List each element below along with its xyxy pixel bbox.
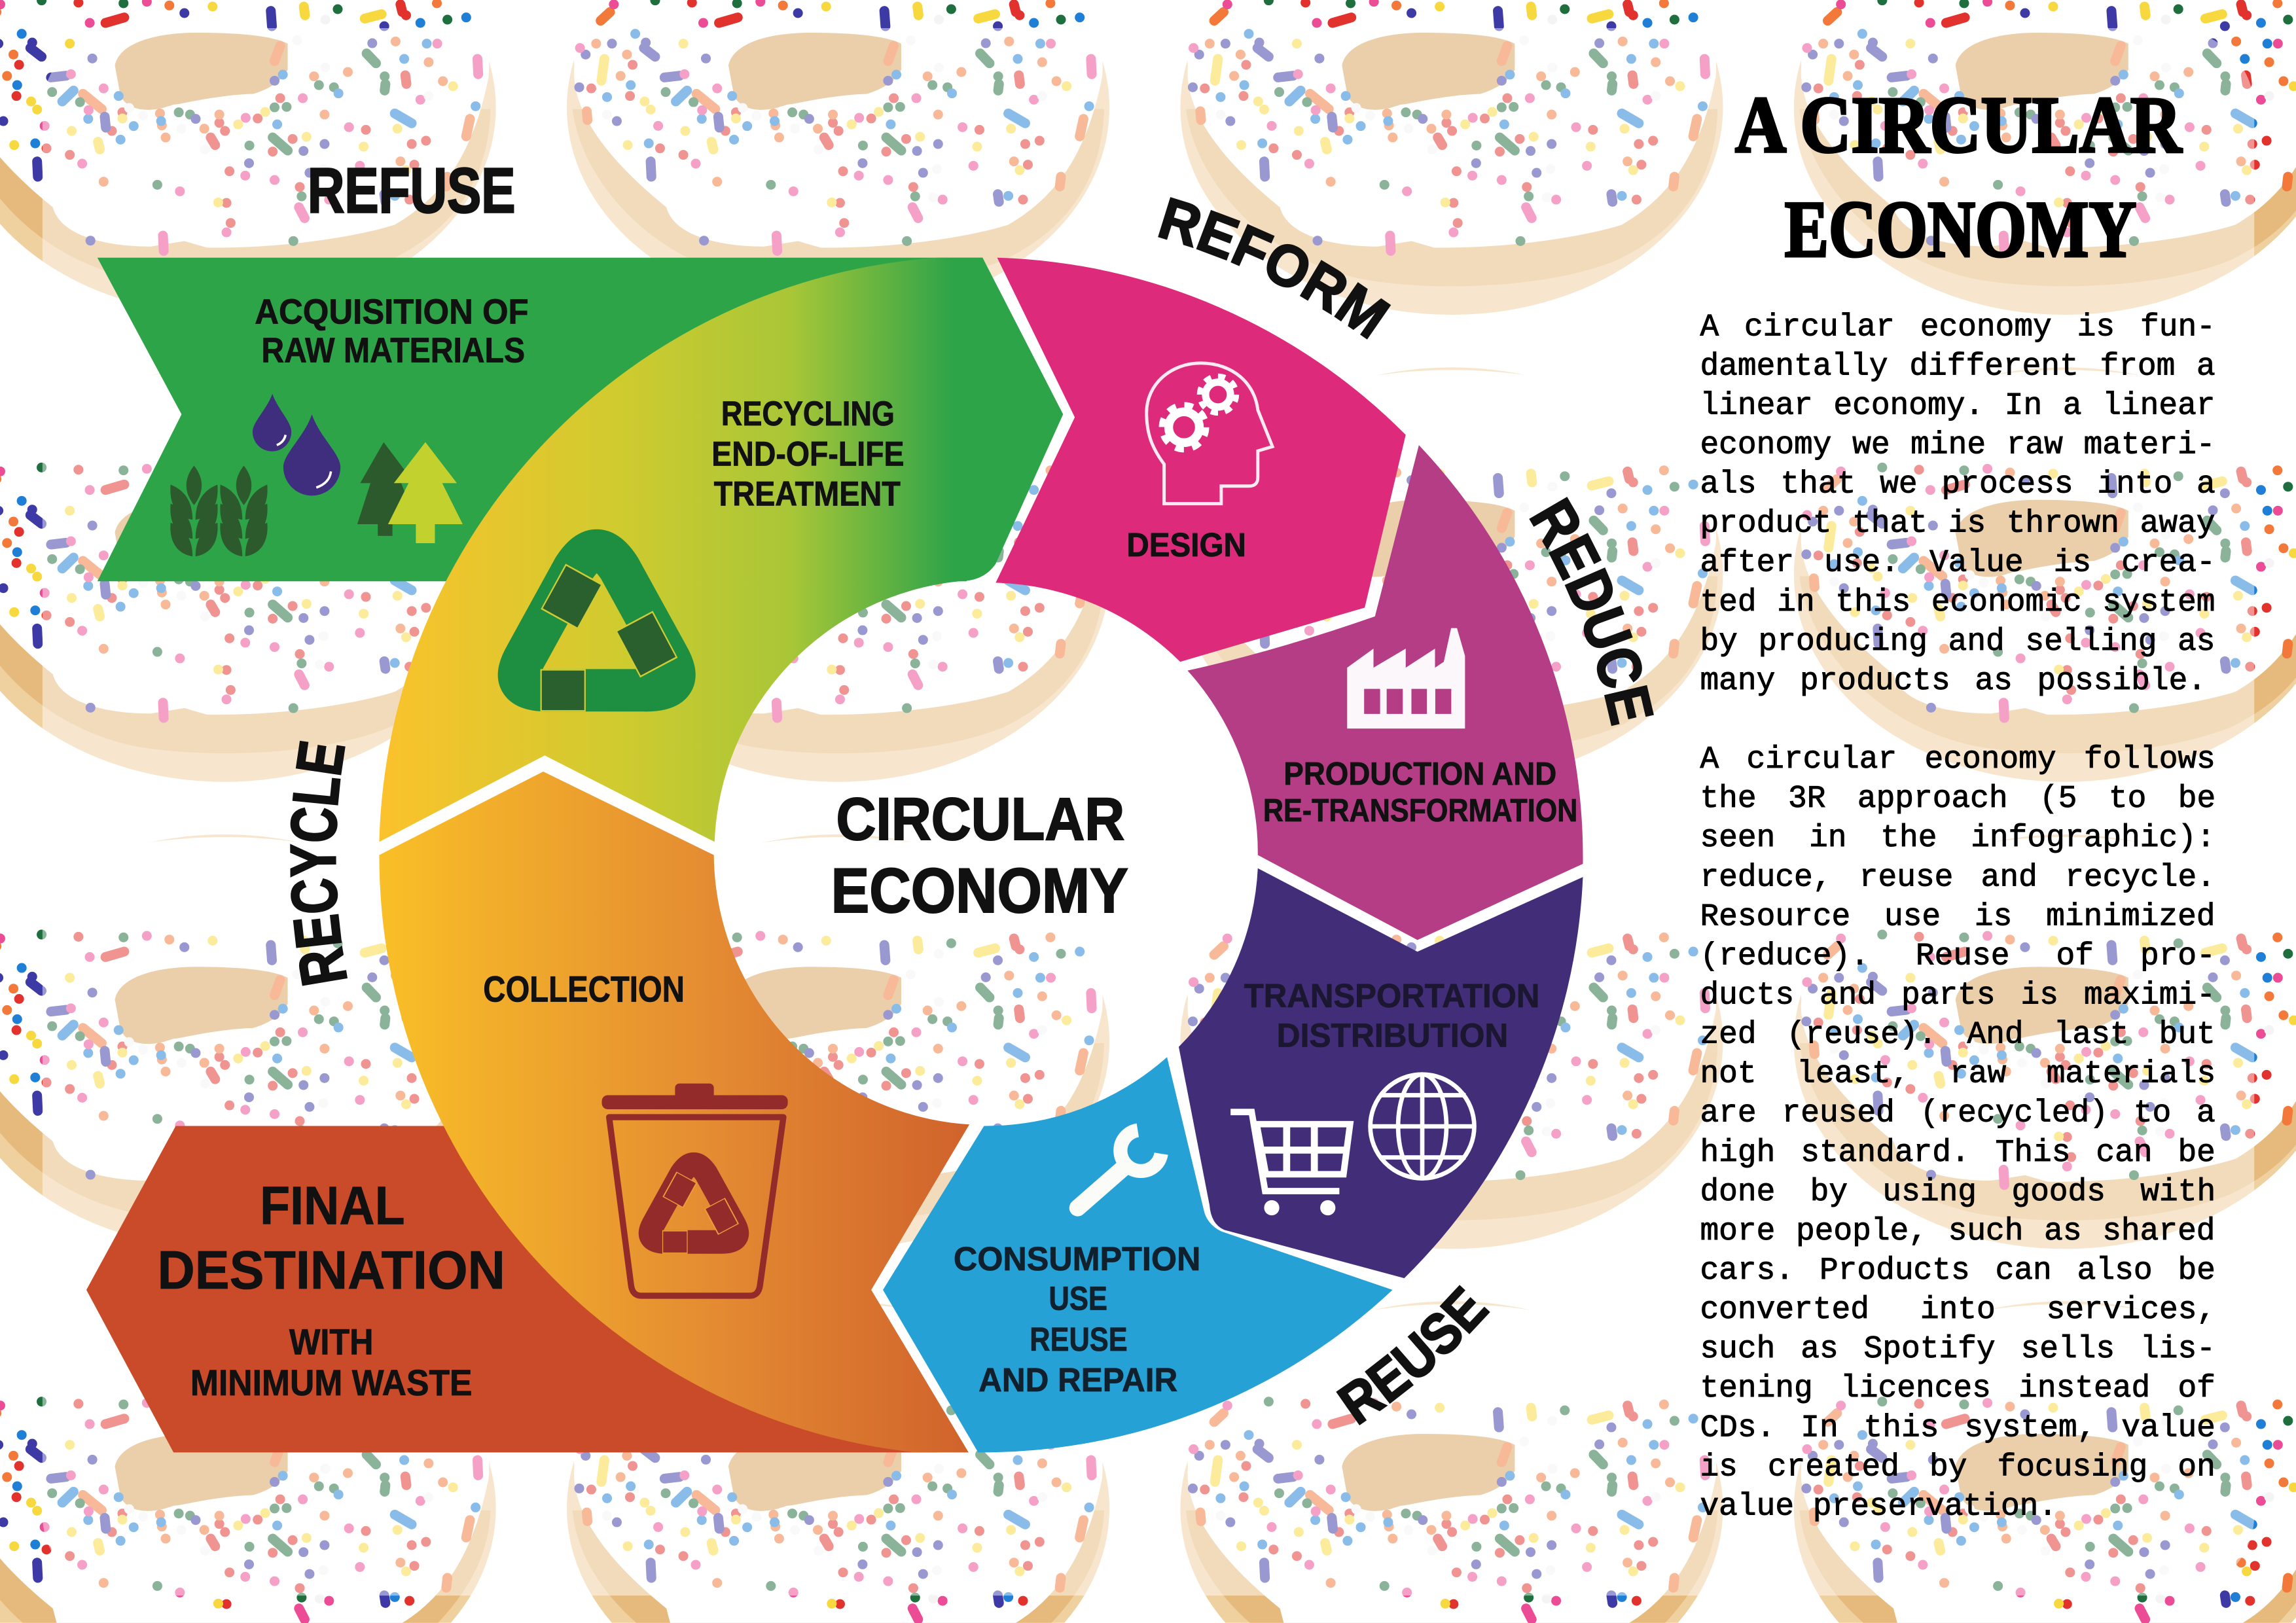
icon: wrench xyxy=(1078,1130,1161,1208)
text: production and re-transformation: RE-TRANSFORMATION xyxy=(1263,793,1577,829)
text block: body paragraphs: product that is thrown away xyxy=(1700,507,2215,542)
panel: recycling end-of-life treatment segment xyxy=(379,258,1063,842)
text block: body paragraphs: tening licences instead of xyxy=(1700,1371,2215,1406)
text block: body paragraphs: high standard. This can be xyxy=(1700,1135,2215,1171)
text: final destination: FINAL xyxy=(260,1175,405,1236)
ring label: reuse: REUSE xyxy=(1336,1285,1490,1425)
text: production and re-transformation: PRODUCTION AND xyxy=(1283,756,1556,792)
text: recycling end-of-life treatment: RECYCLING xyxy=(721,395,895,433)
panel: design segment xyxy=(996,258,1406,662)
text block: body paragraphs: seen in the infographic): xyxy=(1700,821,2215,856)
icon: green recycling triangle xyxy=(519,550,674,690)
text block: body paragraphs: converted into services, xyxy=(1700,1293,2215,1328)
icon: head with gears xyxy=(1147,363,1272,504)
text: final destination: WITH xyxy=(289,1321,373,1362)
title: a circular economy xyxy=(1735,80,2182,274)
text: consumption use reuse and repair: AND REPAIR xyxy=(978,1361,1177,1399)
text: collection: COLLECTION xyxy=(483,969,685,1009)
text block: body paragraphs: als that we process into a xyxy=(1700,467,2215,503)
text: consumption use reuse and repair: CONSUMPTION xyxy=(954,1240,1200,1277)
center heading: circular economy: CIRCULAR xyxy=(836,786,1124,853)
panel: transportation distribution segment xyxy=(1179,868,1583,1278)
text block: body paragraphs: many products as possible. xyxy=(1700,664,2206,699)
text: consumption use reuse and repair: USE xyxy=(1049,1279,1107,1317)
ring label: reform: REFORM xyxy=(1158,197,1391,340)
icon: wheat xyxy=(170,465,268,556)
text block: body paragraphs: economy we mine raw materi- xyxy=(1700,428,2215,463)
icon: trees xyxy=(357,442,463,543)
text block: body paragraphs xyxy=(1700,310,2215,1524)
text: acquisition of raw materials: ACQUISITION OF xyxy=(255,292,529,331)
icon: shopping cart xyxy=(1230,1112,1350,1215)
text: recycling end-of-life treatment: TREATMENT xyxy=(714,475,901,514)
icon: factory xyxy=(1347,628,1465,728)
title: a circular economy: ECONOMY xyxy=(1785,185,2136,274)
panel: consumption use reuse and repair segment xyxy=(883,1057,1393,1452)
panel: final destination banner xyxy=(86,1126,937,1452)
text block: body paragraphs: ducts and parts is maximi- xyxy=(1700,978,2215,1014)
text: final destination xyxy=(158,1175,505,1403)
text block: body paragraphs: linear economy. In a linear xyxy=(1700,388,2215,423)
text block: body paragraphs: A circular economy follows xyxy=(1700,742,2215,777)
ring label: refuse: REFUSE xyxy=(308,154,516,226)
text block: body paragraphs: after use. Value is crea- xyxy=(1700,546,2215,581)
text block: body paragraphs: ted in this economic system xyxy=(1700,585,2215,620)
text: design: DESIGN xyxy=(1126,526,1246,563)
text: recycling end-of-life treatment: END-OF-LIFE xyxy=(711,435,904,473)
icon: recycling bin xyxy=(602,1084,788,1296)
center heading: circular economy: ECONOMY xyxy=(831,856,1128,926)
text block: body paragraphs: zed (reuse). And last but xyxy=(1700,1018,2215,1053)
text: consumption use reuse and repair xyxy=(954,1240,1200,1399)
panel: collection segment xyxy=(379,772,969,1452)
ring label: reduce: REDUCE xyxy=(1529,497,1654,726)
text: acquisition of raw materials xyxy=(255,292,529,370)
text block: body paragraphs: such as Spotify sells lis- xyxy=(1700,1332,2215,1367)
text block: body paragraphs: A circular economy is fun- xyxy=(1700,310,2215,345)
title: a circular economy: A CIRCULAR xyxy=(1735,80,2182,169)
text block: body paragraphs: cars. Products can also be xyxy=(1700,1253,2215,1289)
text block: body paragraphs: are reused (recycled) to a xyxy=(1700,1096,2215,1132)
ring label: recycle: RECYCLE xyxy=(290,741,348,986)
panel: production and re-transformation segment xyxy=(1187,445,1583,940)
icon: globe xyxy=(1371,1075,1475,1179)
text block: body paragraphs: reduce, reuse and recycle. xyxy=(1700,860,2215,895)
text block: body paragraphs: is created by focusing on xyxy=(1700,1450,2215,1485)
text: final destination: DESTINATION xyxy=(158,1240,505,1300)
icon: water drops xyxy=(253,394,340,495)
text: transportation distribution: DISTRIBUTION xyxy=(1277,1016,1508,1054)
text block: body paragraphs: done by using goods with xyxy=(1700,1175,2215,1210)
text: final destination: MINIMUM WASTE xyxy=(190,1362,473,1403)
text: recycling end-of-life treatment xyxy=(711,395,904,514)
text block: body paragraphs: more people, such as shared xyxy=(1700,1214,2215,1249)
text block: body paragraphs: by producing and selling as xyxy=(1700,624,2215,660)
text block: body paragraphs: Resource use is minimized xyxy=(1700,899,2215,935)
text block: body paragraphs: not least, raw materials xyxy=(1700,1057,2215,1092)
text: consumption use reuse and repair: REUSE xyxy=(1030,1320,1128,1358)
text block: body paragraphs: value preservation. xyxy=(1700,1489,2057,1524)
text: transportation distribution: TRANSPORTATION xyxy=(1244,976,1539,1014)
text: transportation distribution xyxy=(1244,976,1539,1054)
text block: body paragraphs: the 3R approach (5 to be xyxy=(1700,781,2215,817)
text block: body paragraphs: damentally different from a xyxy=(1700,349,2215,384)
text block: body paragraphs: (reduce). Reuse of pro- xyxy=(1700,938,2215,974)
panel: acquisition of raw materials banner xyxy=(98,258,1063,581)
text block: body paragraphs: CDs. In this system, value xyxy=(1700,1410,2215,1446)
center heading: circular economy xyxy=(831,786,1128,926)
text: production and re-transformation xyxy=(1263,756,1577,829)
text: acquisition of raw materials: RAW MATERIALS xyxy=(261,331,525,370)
